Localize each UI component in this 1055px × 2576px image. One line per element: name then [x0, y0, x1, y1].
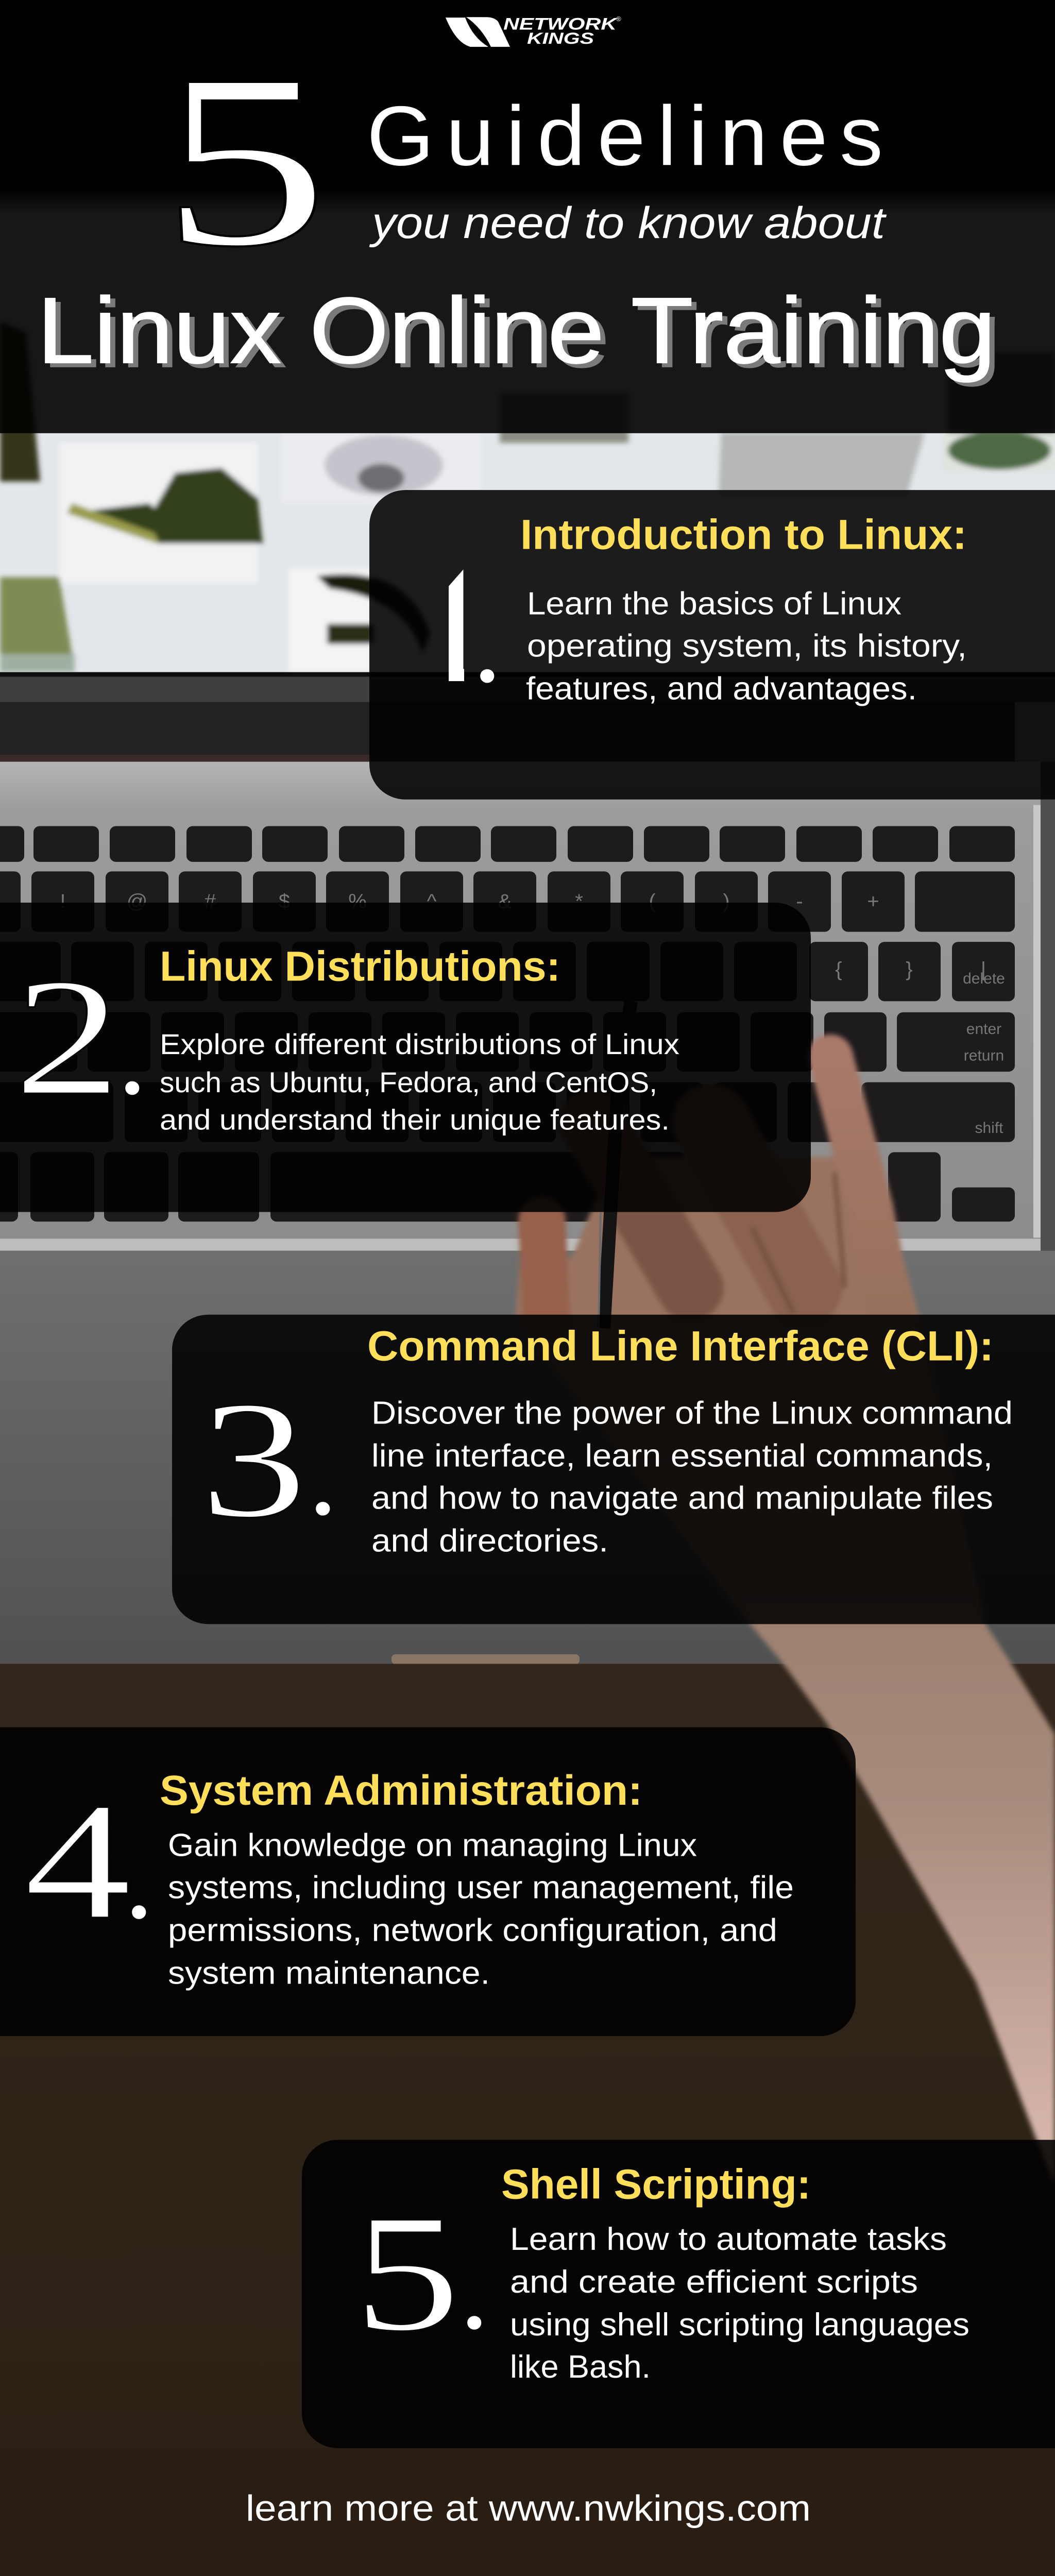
body 3: Discover the power of the Linux command — [371, 1395, 1013, 1431]
hand and arm — [515, 1001, 1055, 2186]
key legends: ) — [723, 890, 730, 913]
key legends: | — [981, 958, 986, 980]
panel 5: Shell Scripting: . — [460, 2225, 489, 2353]
panel 4: System Administration: . — [124, 1815, 154, 1943]
key legends: - — [796, 890, 803, 913]
panel 3: Command Line Interface: . — [308, 1411, 337, 1539]
key legends: ! — [60, 890, 66, 913]
body 3: and directories. — [371, 1523, 608, 1559]
heading 4: System Administration: — [160, 1767, 642, 1814]
key legends: delete — [963, 970, 1005, 987]
body 2 — [160, 1028, 679, 1136]
body 5: using shell scripting languages — [510, 2307, 969, 2343]
body 1: features, and advantages. — [526, 671, 917, 706]
body 2: such as Ubuntu, Fedora, and CentOS, — [160, 1066, 657, 1098]
laptop bezel — [0, 672, 1055, 762]
title band — [0, 0, 1055, 433]
key legends: return — [964, 1047, 1004, 1064]
key legends: { — [835, 958, 842, 980]
body 5: Learn how to automate tasks — [510, 2222, 947, 2257]
number 4: 4 — [24, 1769, 131, 1954]
number 2: 2 — [14, 945, 121, 1130]
body 2: and understand their unique features. — [160, 1104, 670, 1136]
body 5: like Bash. — [510, 2349, 651, 2385]
key legends: + — [867, 890, 879, 913]
title: Linux Online Training: Linux Online Training — [42, 282, 1001, 386]
logo: Network Kings: KINGS — [527, 29, 594, 47]
key legends: & — [498, 890, 512, 913]
body 4 — [168, 1827, 794, 1991]
key legends: shift — [975, 1120, 1003, 1137]
title: Linux Online Training: Linux Online Training — [37, 278, 996, 383]
body 4: Gain knowledge on managing Linux — [168, 1827, 697, 1863]
footer call to action: learn more at www.nwkings.com — [246, 2488, 811, 2529]
key legends: * — [575, 890, 583, 913]
body 4: systems, including user management, file — [168, 1870, 794, 1905]
panel 1: Introduction to Linux: . — [472, 579, 502, 707]
heading: Guidelines: Guidelines — [367, 89, 883, 183]
key legends: # — [205, 890, 216, 913]
logo: Network Kings: ® — [616, 15, 621, 23]
body 4: system maintenance. — [168, 1955, 490, 1991]
big numeral 5: 5 — [161, 24, 329, 298]
key legends: ( — [649, 890, 656, 913]
key legends: @ — [127, 890, 147, 913]
heading 5: Shell Scripting: — [501, 2160, 811, 2208]
key legends: $ — [279, 890, 290, 913]
laptop deck — [0, 762, 1055, 1664]
panel 2: Linux Distributions: . — [117, 990, 147, 1118]
panel 4: System Administration — [0, 1727, 856, 2036]
heading 3: Command Line Interface (CLI): — [367, 1323, 994, 1369]
body 5 — [510, 2222, 969, 2385]
panel 5: Shell Scripting — [302, 2140, 1055, 2448]
body 1: operating system, its history, — [527, 628, 967, 664]
key legends — [60, 890, 1005, 1137]
body 4: permissions, network configuration, and — [168, 1912, 777, 1948]
key legends: enter — [966, 1021, 1001, 1038]
subheading: you need to know about — [369, 198, 887, 248]
logo: Network Kings: NETWORK — [503, 14, 618, 33]
keyboard — [0, 826, 1015, 1222]
laptop screen — [0, 191, 1055, 672]
body 3: and how to navigate and manipulate files — [371, 1480, 993, 1516]
desk — [0, 1664, 1055, 2576]
body 2: Explore different distributions of Linux — [160, 1028, 679, 1060]
heading 1: Introduction to Linux: — [520, 511, 967, 558]
key legends: % — [348, 890, 367, 913]
body 3: line interface, learn essential commands, — [371, 1438, 993, 1474]
body 5: and create efficient scripts — [510, 2264, 918, 2300]
body 3 — [371, 1395, 1013, 1559]
number 5: 5 — [353, 2181, 461, 2366]
number 1: 1 — [406, 534, 500, 716]
body 1: Learn the basics of Linux — [527, 586, 901, 621]
key legends: } — [906, 958, 913, 980]
logo: Network Kings — [446, 14, 621, 47]
heading 2: Linux Distributions: — [160, 942, 560, 990]
number 3: 3 — [200, 1367, 307, 1553]
body 1 — [526, 586, 967, 706]
key legends: ^ — [427, 890, 437, 913]
panel 1: Introduction to Linux — [369, 490, 1055, 800]
panel 3: Command Line Interface — [172, 1315, 1055, 1624]
panel 2: Linux Distributions — [0, 903, 811, 1212]
